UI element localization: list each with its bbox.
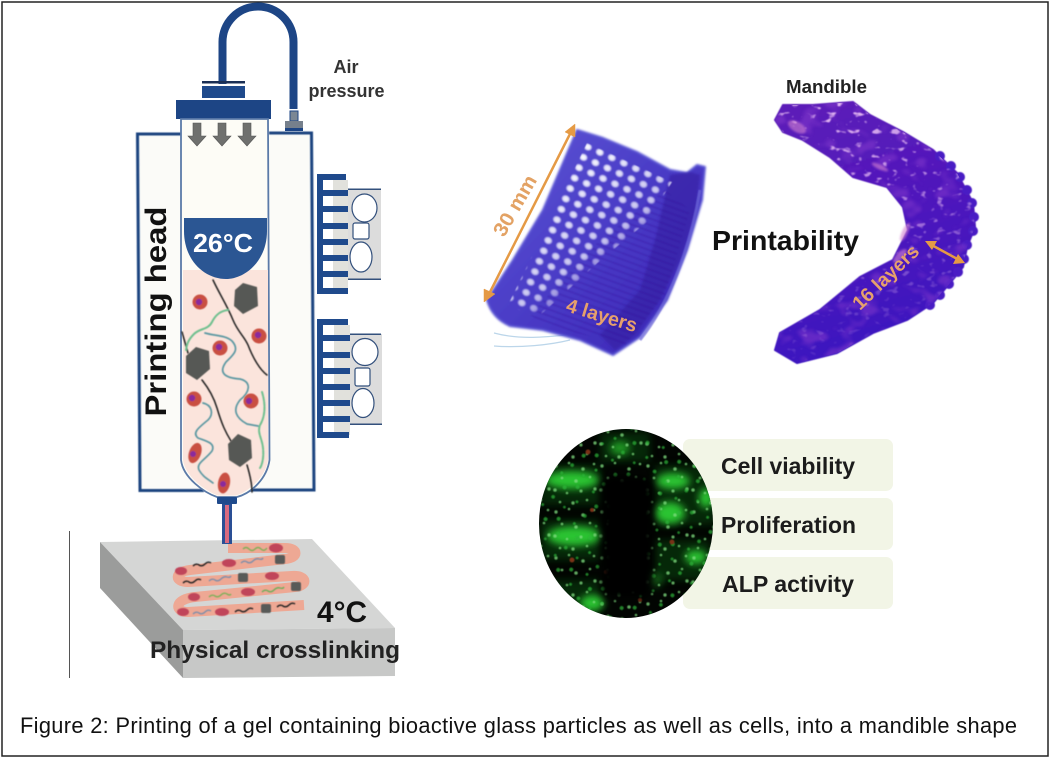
outcome pills xyxy=(683,439,893,609)
dark central strut xyxy=(602,476,652,598)
pill: cell viability xyxy=(683,439,893,491)
mandible speckle texture xyxy=(775,102,975,363)
scaffold print xyxy=(484,124,705,355)
figure caption: Figure 2: Printing of a gel containing bioactive glass particles as well as cells, into a mandible shape xyxy=(20,713,1017,738)
air pressure label: pressure xyxy=(308,81,385,101)
syringe barrel xyxy=(181,119,270,497)
scaffold shading xyxy=(600,172,700,350)
printed serpentine xyxy=(178,548,304,612)
green cell speckles xyxy=(541,430,713,618)
pill: ALP activity: ALP activity xyxy=(722,571,854,597)
pill: ALP activity xyxy=(683,557,893,609)
mandible highlights xyxy=(786,118,912,265)
upper cooling fan xyxy=(317,174,381,294)
printing apparatus xyxy=(138,6,385,497)
housing outline xyxy=(138,133,314,490)
air pressure connector xyxy=(285,111,303,131)
16 layers label: 16 layers xyxy=(848,240,924,315)
mandible thickness arrow xyxy=(925,241,965,264)
cells xyxy=(186,294,266,494)
pill: proliferation: Proliferation xyxy=(721,512,856,538)
printing head housing xyxy=(138,134,314,490)
mandible dark mottling xyxy=(775,102,975,363)
bioink fill xyxy=(183,270,268,496)
mandible print xyxy=(775,102,979,363)
strand contents xyxy=(175,544,301,616)
plate left face xyxy=(100,542,183,678)
printing head label: Printing head xyxy=(140,206,173,416)
polymer strands xyxy=(182,280,267,492)
scaffold wisps xyxy=(494,333,570,347)
glass particles xyxy=(186,283,258,467)
scaffold body xyxy=(487,130,705,355)
crosslinking label: Physical crosslinking xyxy=(150,637,400,664)
plate front face xyxy=(183,628,395,678)
mandible label: Mandible xyxy=(786,76,867,97)
plate temperature: 4°C xyxy=(317,596,367,629)
temperature reservoir xyxy=(184,218,267,279)
build plate with printed strand xyxy=(100,497,400,678)
plate top surface xyxy=(100,539,395,630)
micrograph background xyxy=(535,425,717,623)
scaffold stripes xyxy=(530,190,690,345)
30 mm arrow xyxy=(484,124,575,302)
lower cooling fan xyxy=(317,319,382,438)
pill: proliferation xyxy=(683,498,893,550)
4 layers label: 4 layers xyxy=(564,295,640,337)
red dead-cell specks xyxy=(570,450,674,602)
temperature reservoir: 26°C xyxy=(193,228,253,258)
green cell clusters xyxy=(545,441,713,611)
pill: cell viability: Cell viability xyxy=(721,453,855,479)
printability heading: Printability xyxy=(712,225,859,256)
more speckles xyxy=(541,429,713,617)
air tube xyxy=(222,6,294,109)
mandible body xyxy=(775,102,979,363)
stray left rule xyxy=(69,531,70,678)
air pressure label: Air xyxy=(333,57,359,77)
nozzle xyxy=(217,497,237,544)
scaffold rim xyxy=(640,190,700,340)
pressure arrows xyxy=(188,123,256,146)
piston cap xyxy=(176,81,271,119)
green haze bands xyxy=(540,432,715,610)
scaffold pores xyxy=(508,143,672,318)
fluorescence micrograph xyxy=(535,425,717,623)
30 mm label: 30 mm xyxy=(489,171,542,240)
